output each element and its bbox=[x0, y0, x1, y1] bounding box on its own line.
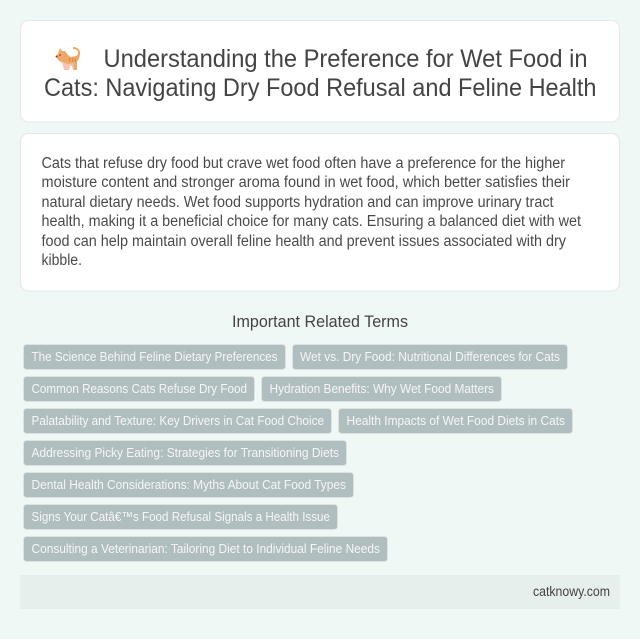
panel: description bbox=[20, 134, 620, 291]
text block: description bbox=[42, 155, 582, 269]
heading: related terms: Important Related Terms bbox=[232, 313, 408, 331]
chip: signs: Signs Your Catâ€™s Food Refusal Signals a Health Issue bbox=[32, 509, 330, 524]
chip: wet vs dry bbox=[292, 344, 568, 370]
chip: common reasons: Common Reasons Cats Refuse Dry Food bbox=[32, 381, 247, 396]
footer site name: catknowy.com bbox=[533, 584, 610, 599]
chip: veterinarian: Consulting a Veterinarian: Tailoring Diet to Individual Feline Needs bbox=[32, 541, 380, 556]
title: Understanding the Preference for Wet Food in bbox=[104, 45, 588, 73]
text block: description: kibble. bbox=[42, 252, 82, 269]
chip: wet vs dry: Wet vs. Dry Food: Nutritional Differences for Cats bbox=[300, 349, 560, 364]
chip: dental bbox=[24, 472, 354, 498]
chip: dental: Dental Health Considerations: Myths About Cat Food Types bbox=[32, 477, 346, 492]
chip: health impacts: Health Impacts of Wet Food Diets in Cats bbox=[346, 413, 565, 428]
footer bbox=[20, 575, 620, 609]
text block: description: health, making it a beneficial choice for many cats. Ensuring a balanced diet with wet bbox=[42, 213, 582, 230]
text block: description: natural dietary needs. Wet food supports hydration and can improve urinary tract bbox=[42, 194, 554, 211]
chip: palatability: Palatability and Texture: Key Drivers in Cat Food Choice bbox=[32, 413, 324, 428]
chip: picky eating bbox=[24, 440, 346, 466]
chip: science bbox=[24, 344, 286, 370]
chip: hydration bbox=[262, 376, 502, 402]
chip: palatability bbox=[24, 408, 332, 434]
text block: description: Cats that refuse dry food but crave wet food often have a preference for the higher bbox=[42, 155, 565, 172]
chip: picky eating: Addressing Picky Eating: Strategies for Transitioning Diets bbox=[32, 445, 339, 460]
chip: signs bbox=[24, 504, 338, 530]
chip: hydration: Hydration Benefits: Why Wet Food Matters bbox=[270, 381, 494, 396]
chip: health impacts bbox=[338, 408, 572, 434]
chip: common reasons bbox=[24, 376, 254, 402]
chip: science: The Science Behind Feline Dietary Preferences bbox=[32, 349, 278, 364]
related terms chips bbox=[24, 344, 572, 562]
text block: description: food can help maintain overall feline health and prevent issues associated with dry bbox=[42, 233, 566, 250]
title bbox=[44, 45, 596, 102]
text block: description: moisture content and stronger aroma found in wet food, which better satisfies their bbox=[42, 174, 570, 191]
icon: cat bbox=[56, 47, 80, 70]
panel: title card bbox=[20, 20, 620, 122]
title: Cats: Navigating Dry Food Refusal and Feline Health bbox=[44, 74, 596, 102]
chip: veterinarian bbox=[24, 536, 388, 562]
